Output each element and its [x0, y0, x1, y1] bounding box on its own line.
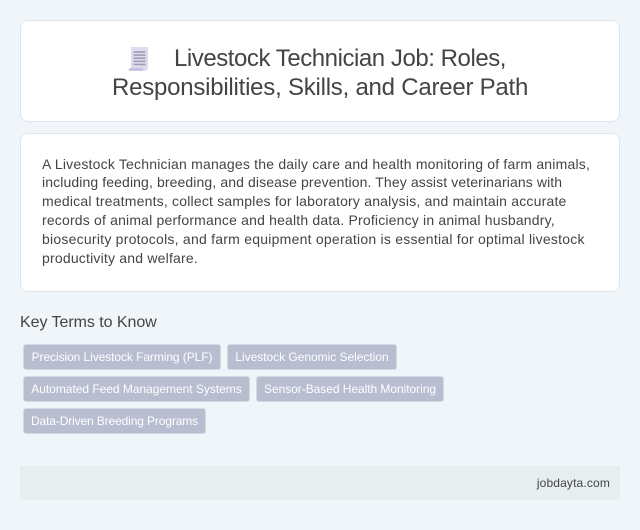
- icon: document: [128, 47, 148, 71]
- heading: key terms: Key Terms to Know: [20, 314, 157, 331]
- tag: [23, 344, 221, 370]
- tag: [23, 408, 206, 434]
- tag: [23, 376, 250, 402]
- tag: [227, 344, 397, 370]
- tag: Data-Driven Breeding Programs: [31, 414, 198, 428]
- footer source: jobdayta.com: [537, 476, 610, 490]
- description text: medical treatments, collect samples for laboratory analysis, and maintain accurate: [42, 193, 567, 209]
- description text: [42, 156, 590, 266]
- tag: Automated Feed Management Systems: [31, 382, 242, 396]
- tag: Livestock Genomic Selection: [235, 350, 389, 364]
- tag list: [23, 344, 444, 434]
- description text: productivity and welfare.: [42, 250, 198, 266]
- title: [112, 45, 528, 101]
- title: Responsibilities, Skills, and Career Path: [112, 74, 528, 101]
- description text: A Livestock Technician manages the daily care and health monitoring of farm animals,: [42, 156, 590, 172]
- title: Livestock Technician Job: Roles,: [174, 45, 506, 72]
- description text: biosecurity protocols, and farm equipment operation is essential for optimal livestock: [42, 231, 585, 247]
- footer bar: [20, 466, 620, 500]
- description card: [20, 133, 620, 292]
- tag: [256, 376, 444, 402]
- title card: [20, 20, 620, 122]
- description text: records of animal performance and health data. Proficiency in animal husbandry,: [42, 212, 555, 228]
- description text: including feeding, breeding, and disease prevention. They assist veterinarians with: [42, 174, 562, 190]
- tag: Sensor-Based Health Monitoring: [264, 382, 436, 396]
- tag: Precision Livestock Farming (PLF): [32, 350, 212, 364]
